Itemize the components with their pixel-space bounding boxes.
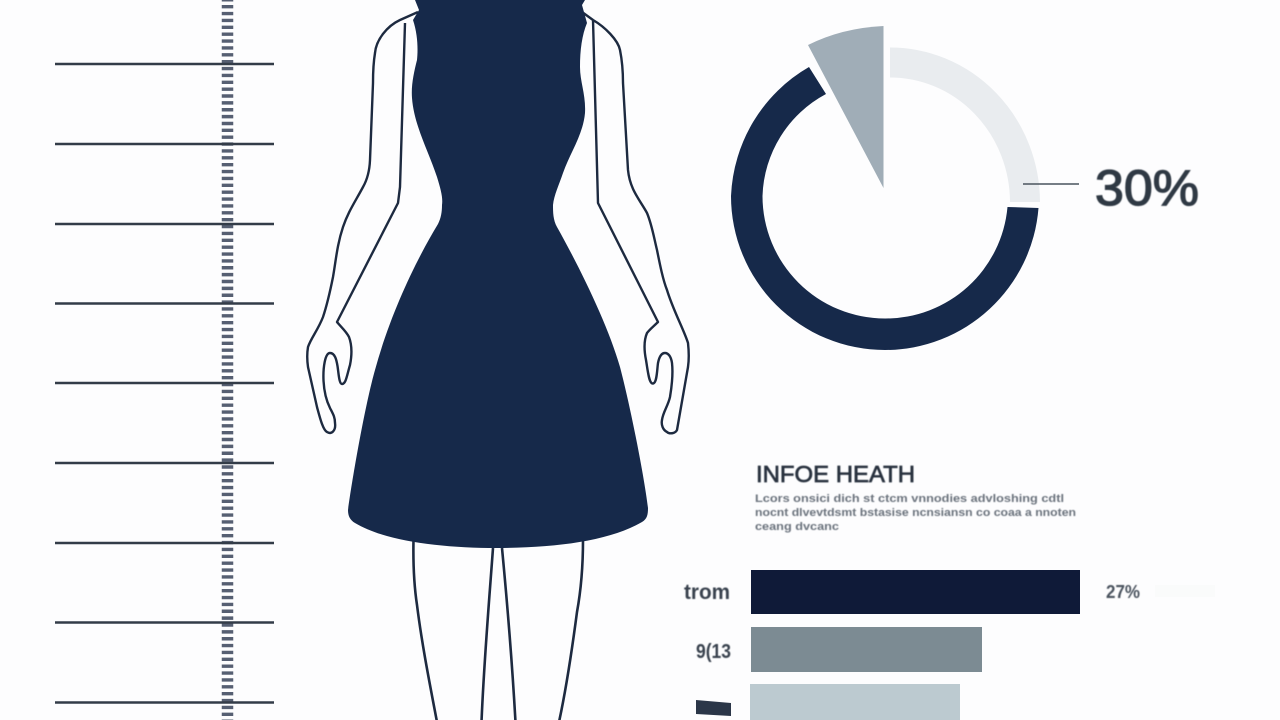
body text block: ceang dvcanc [755,521,839,533]
donut chart [731,26,1038,350]
body text block [755,493,1076,533]
heading: INFOE HEATH [756,461,915,487]
body text block: nocnt dlvevtdsmt bstasise ncnsiansn co coaa a nnoten [755,507,1076,519]
ruler horizontal marks [55,64,274,702]
bar chart [684,570,1215,720]
bar 3 label block [696,700,731,716]
height ruler [55,0,274,720]
bar 1 [684,570,1215,614]
female figure [307,0,689,720]
bar 3 fill [750,684,960,720]
ruler dashed scale [222,0,233,720]
bar 2 fill [751,627,982,672]
bar 1 label: trom [684,581,730,604]
light segment [890,62,1025,202]
grey pulled-out wedge [808,26,884,188]
faint ghost caption [1155,585,1215,597]
dress silhouette [348,0,648,548]
bar 1 value: 27% [1106,582,1140,602]
bar 2 [696,627,982,672]
callout value: 30% [1095,160,1199,216]
callout leader line [1023,183,1079,185]
body text block: Lcors onsici dich st ctcm vnnodies advloshing cdtl [755,493,1064,505]
legs outline [413,540,583,720]
bar 3 [696,684,960,720]
right arm outline [582,12,689,433]
left arm outline [307,12,418,433]
bar 2 label: 9(13 [696,641,731,663]
bar 1 fill [751,570,1080,614]
dark segment [731,67,1038,350]
